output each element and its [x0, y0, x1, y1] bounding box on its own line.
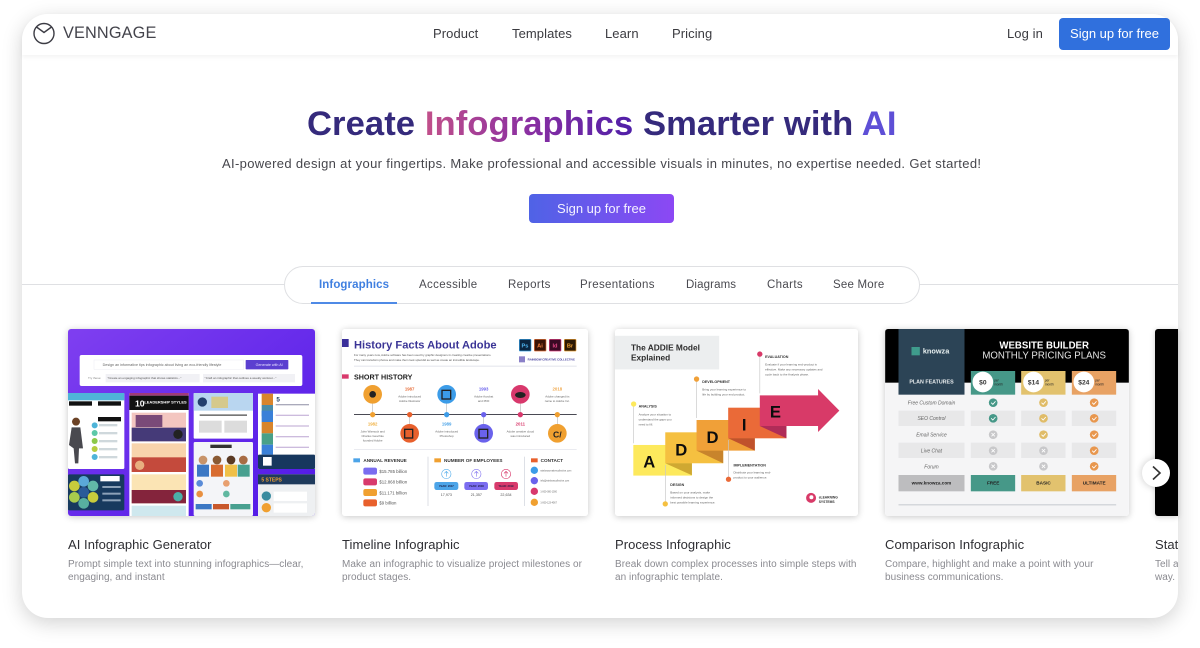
elearning logo: eLEARNING [819, 496, 838, 500]
number of employees: 21,357 [471, 493, 482, 497]
step labels: product to your audience. [734, 476, 767, 480]
card description: clipped next card: way. [1155, 572, 1175, 583]
stepped arrow: A [643, 453, 655, 472]
navigation bar [22, 14, 1178, 55]
icon: chevron right [1152, 466, 1162, 480]
template: five steps [258, 474, 315, 516]
timeline: Adobe Acrobat [474, 394, 493, 398]
stepped arrow: E [770, 403, 781, 422]
black header: WEBSITE BUILDER [999, 340, 1089, 351]
template: leadership styles [129, 393, 189, 516]
nav link: Pricing: Pricing [672, 26, 712, 41]
timeline: was introduced [511, 434, 531, 438]
card description: AI Infographic Generator [68, 559, 304, 583]
brand [519, 356, 575, 362]
card description: Timeline Infographic: Make an infographic to visualize project milestones or [342, 559, 582, 570]
template: recruitment process [194, 393, 253, 439]
number of employees: YEAR: 2018 [469, 484, 484, 488]
card title: Process Infographic: Process Infographic [615, 537, 731, 552]
feature rows [898, 400, 1116, 470]
step labels: Analyze your situation to [639, 412, 671, 416]
subtitle: AI-powered design at your fingertips. Make professional and accessible visuals in minutes, no expertise needed. Get started! [222, 156, 981, 171]
short history heading: SHORT HISTORY [354, 373, 413, 381]
timeline: Adobe changed its [545, 394, 570, 398]
card title: AI Infographic Generator: AI Infographic Generator [68, 537, 212, 552]
timeline: Photoshop [440, 434, 454, 438]
plan footer: ULTIMATE [1083, 481, 1106, 486]
step labels: informed decisions to design the [670, 496, 713, 500]
step labels: DESIGN [670, 483, 685, 487]
stepped arrow: D [707, 428, 719, 447]
tab underline [311, 302, 397, 304]
annual revenue: $11.171 billion [379, 490, 408, 495]
timeline: C/ [553, 429, 562, 439]
step labels: IMPLEMENTATION [734, 463, 766, 467]
step labels: best possible learning experience. [670, 501, 716, 505]
step labels: Evaluate if your learning end-product is [765, 362, 817, 366]
template: character list [68, 393, 124, 469]
tab: Charts: Charts [767, 279, 803, 291]
card description: AI Infographic Generator: engaging, and instant [68, 572, 165, 583]
price tags: per [993, 378, 1000, 382]
timeline: Charles Geschke [361, 434, 384, 438]
step labels: DEVELOPMENT [702, 380, 731, 384]
tab: See More: See More [833, 279, 884, 291]
heading: Explained [631, 353, 670, 363]
black header: MONTHLY PRICING PLANS [982, 351, 1106, 362]
price tags: $24 [1078, 379, 1090, 386]
template: leadership styles: 10 [135, 399, 145, 409]
timeline: name to Adobe Inc. [545, 399, 570, 403]
icon: venngage logo [33, 22, 55, 44]
annual revenue: ANNUAL REVENUE [363, 458, 407, 463]
number of employees: 22,634 [500, 493, 512, 497]
number of employees [434, 458, 518, 497]
timeline: founded Adobe [363, 439, 383, 443]
timeline: John Warnock and [361, 429, 385, 433]
contact: 1-000-000-1000 [540, 491, 558, 493]
hero button: sign up [529, 194, 674, 223]
tab: Accessible: Accessible [419, 279, 477, 291]
step labels: life by building your end product. [702, 393, 745, 397]
tab: Infographics active: Infographics [319, 279, 389, 291]
step labels: need to fill. [639, 422, 653, 426]
nav link: Learn: Learn [605, 26, 639, 41]
prompt box: Generate with AI [256, 363, 283, 367]
timeline: 1989 [442, 422, 452, 427]
price tags: $0 [979, 379, 987, 386]
stepped arrow: D [675, 440, 687, 459]
prompt box: "Create an engaging infographic that shows statistics..." [107, 376, 181, 380]
check marks [989, 398, 1098, 471]
divider line [22, 284, 1178, 285]
step labels [631, 351, 823, 507]
plan features column: PLAN FEATURES [909, 380, 954, 386]
plan features column [898, 329, 964, 395]
annual revenue [353, 458, 408, 506]
header [342, 339, 497, 362]
timeline: Adobe Illustrator [399, 399, 420, 403]
logo wordmark: VENNGAGE [63, 24, 156, 42]
logo [33, 22, 156, 44]
step labels: understand the gaps you [639, 417, 672, 421]
header: For many years now, Adobe software has been used by graphic designers in creating creative presentations. [354, 353, 492, 357]
card description: Timeline Infographic [342, 559, 582, 583]
template: food production [258, 394, 315, 469]
card thumbnail: AI infographic generator [68, 329, 315, 516]
template: food production: 5 [276, 396, 280, 403]
black header [885, 329, 1129, 383]
hero button: sign up: Sign up for free [557, 201, 646, 216]
prompt box: "Craft an infographic that outlines a weekly workout..." [205, 376, 276, 380]
feature rows: Forum [924, 464, 939, 470]
feature rows: Email Service [916, 432, 947, 438]
card thumbnail: clipped next card [1155, 329, 1178, 516]
plan features column: knowza [923, 347, 950, 356]
tab bar [284, 266, 920, 304]
feature rows: Free Custom Domain [908, 400, 955, 406]
heading [615, 336, 719, 369]
icons: adobe apps [519, 339, 576, 351]
step labels: Bring your learning experience to [702, 388, 746, 392]
nav link: Log in: Log in [1007, 26, 1043, 41]
timeline: 2011 [516, 422, 526, 427]
card title: Timeline Infographic: Timeline Infographic [342, 537, 460, 552]
card description: Process Infographic: Break down complex processes into simple steps with [615, 559, 857, 570]
step labels: Based on your analysis, make [670, 491, 710, 495]
next arrow button [1142, 459, 1170, 487]
timeline: 2018 [553, 386, 563, 391]
step labels: ANALYSIS [639, 405, 657, 409]
card title: Comparison Infographic: Comparison Infographic [885, 537, 1024, 552]
step labels: effective. Make any necessary updates and [765, 367, 823, 371]
step labels: cycle back to the Analysis phase. [765, 372, 809, 376]
price tags: month [1095, 382, 1104, 386]
timeline: Adobe introduced [398, 394, 421, 398]
elearning logo: SYSTEMS [819, 500, 835, 504]
step labels: Distribute your learning end- [734, 471, 771, 475]
card description: Comparison Infographic: business communications. [885, 572, 1003, 583]
card description: Process Infographic: an infographic template. [615, 572, 723, 583]
card title: clipped next card: Stat [1155, 537, 1178, 552]
template: leadership styles: LEADERSHIP STYLES [144, 400, 187, 405]
timeline [354, 385, 577, 443]
card description: Comparison Infographic: Compare, highlight and make a point with your [885, 559, 1093, 570]
nav button: sign up [1059, 18, 1170, 50]
price tags: month [994, 382, 1003, 386]
brand: RAINBOW CREATIVE COLLECTIVE [528, 358, 575, 362]
contact: CONTACT [541, 458, 563, 463]
prompt box: Design an informative tips infographic about living an eco-friendly lifestyle [103, 363, 221, 367]
header: They can transform photos and make them look splendid as well as create an incredible landscape. [354, 358, 480, 362]
title: Create Infographics Smarter with AI [307, 105, 897, 143]
plan footer: BASIC [1036, 481, 1051, 486]
card description: Comparison Infographic [885, 559, 1094, 583]
feature rows: SEO Control [917, 416, 946, 422]
price tags: $14 [1028, 379, 1039, 386]
nav link: Templates: Templates [512, 26, 572, 41]
contact: 1-000-123-4567 [540, 502, 558, 504]
card thumbnail: timeline infographic [342, 329, 588, 516]
timeline: 1982 [368, 422, 378, 427]
card description: Process Infographic [615, 559, 857, 583]
annual revenue: $12.868 billion [379, 480, 408, 485]
timeline: Adobe creative cloud [507, 429, 534, 433]
contact: rainbowcreativecollective.com [540, 469, 571, 472]
annual revenue: $9 billion [379, 501, 397, 506]
nav link: Product: Product [433, 26, 478, 41]
price tags [971, 371, 1116, 395]
number of employees: YEAR: 2019 [499, 484, 514, 488]
card description: Timeline Infographic: product stages. [342, 572, 411, 583]
plan footer: www.knowza.com [911, 481, 951, 486]
number of employees: NUMBER OF EMPLOYEES [444, 458, 502, 463]
price tags: per [1094, 378, 1101, 382]
timeline: 1987 [405, 386, 415, 391]
step labels: EVALUATION [765, 355, 789, 359]
number of employees: 17,973 [441, 493, 452, 497]
prompt box: Try these: [88, 376, 101, 380]
stepped arrow [633, 389, 839, 476]
price tags: per [1044, 378, 1050, 382]
price tags: month [1045, 382, 1054, 386]
header: History Facts About Adobe [354, 340, 497, 352]
icons: adobe apps: Br [567, 343, 574, 349]
feature rows: Live Chat [921, 448, 943, 454]
contact: info@rainbowcollective.com [540, 480, 569, 483]
template: four people [194, 442, 253, 516]
number of employees: YEAR: 2017 [439, 484, 454, 488]
tab: Presentations: Presentations [580, 279, 655, 291]
annual revenue: $15.785 billion [379, 469, 408, 474]
stepped arrow: I [742, 415, 746, 434]
card description: clipped next card: Tell a [1155, 559, 1178, 570]
card description: clipped next card [1155, 559, 1178, 583]
icons: adobe apps: Ai [537, 343, 543, 349]
tab: Diagrams: Diagrams [686, 279, 736, 291]
template: hexagons [68, 474, 124, 510]
plan footer: FREE [987, 481, 999, 486]
tab: Reports: Reports [508, 279, 551, 291]
timeline: 1993 [479, 386, 489, 391]
card thumbnail: ADDIE process infographic [615, 329, 858, 516]
icons: adobe apps: Ps [522, 343, 528, 349]
timeline: and PDF [478, 399, 490, 403]
timeline: Adobe introduced [435, 429, 458, 433]
card description: AI Infographic Generator: Prompt simple text into stunning infographics—clear, [68, 559, 304, 570]
nav button: sign up: Sign up for free [1070, 26, 1159, 41]
template: five steps: 5 STEPS [261, 477, 283, 483]
elearning logo [806, 493, 838, 504]
prompt box [80, 355, 302, 386]
contact [531, 458, 571, 506]
plan footer [898, 475, 1116, 491]
heading: The ADDIE Model [631, 343, 700, 353]
icons: adobe apps: Id [552, 343, 558, 349]
card thumbnail: comparison pricing infographic [885, 329, 1129, 516]
